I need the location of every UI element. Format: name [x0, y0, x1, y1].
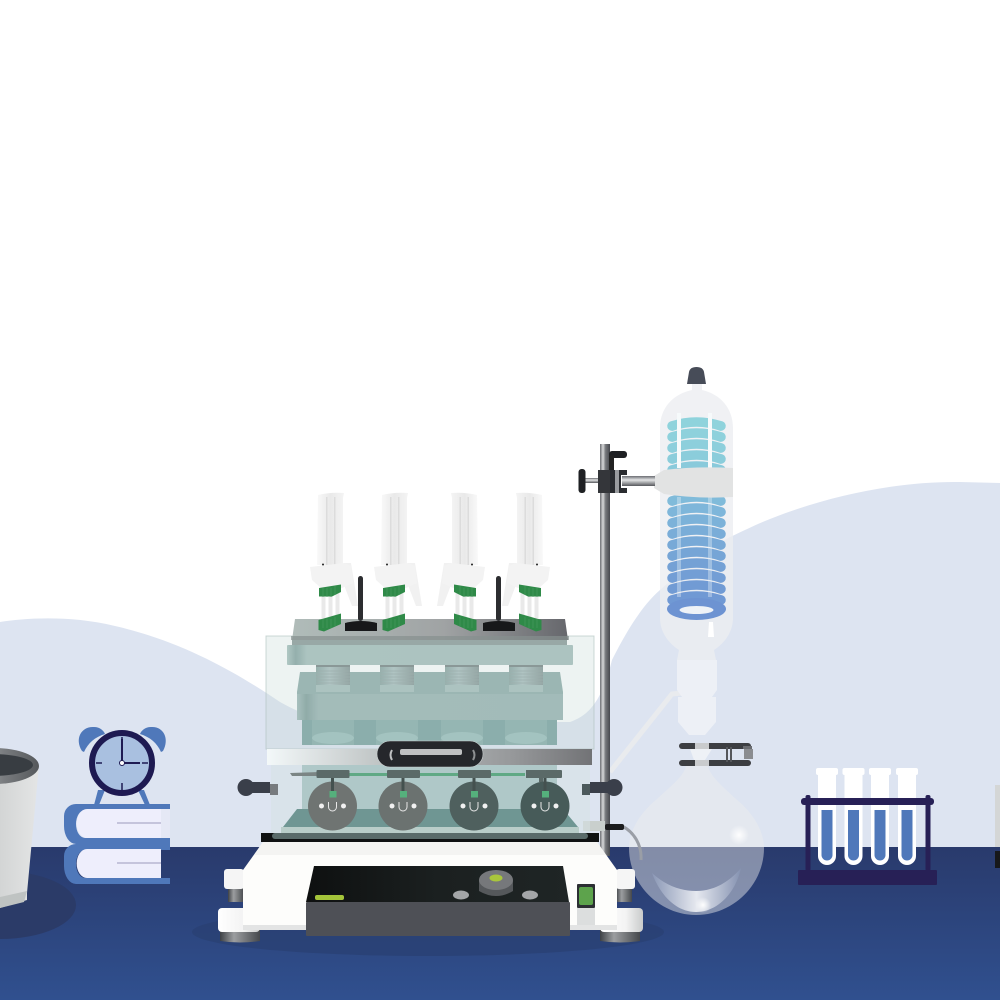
- books and alarm clock: [64, 727, 170, 884]
- mug shadow: [0, 871, 76, 939]
- mug: [0, 748, 76, 939]
- condenser clamp band: [654, 467, 733, 498]
- knob 1: [345, 576, 377, 631]
- round-bottom flask: [629, 743, 764, 915]
- tank side handles: [238, 779, 622, 796]
- flask neck: [690, 749, 712, 760]
- left handle: [238, 779, 278, 796]
- upper slab: [287, 645, 573, 665]
- flask crescent: [652, 868, 741, 912]
- table: [0, 847, 1000, 1000]
- syringe 1: [310, 493, 358, 632]
- tank band: [267, 749, 592, 765]
- syringe 4: [502, 493, 550, 632]
- power switch: [577, 884, 595, 925]
- bath internals: [287, 640, 573, 745]
- stir discs: [308, 770, 570, 830]
- top plate: [292, 619, 568, 640]
- flask clamp: [679, 743, 753, 766]
- condenser glass body: [660, 384, 733, 660]
- retort clamp: [578, 451, 655, 493]
- stand rod: [600, 444, 610, 856]
- middle block: [297, 672, 563, 720]
- tank lid handle: [377, 741, 483, 767]
- stirrer hotplate: [218, 842, 643, 942]
- shadow under stirrer: [192, 908, 664, 956]
- lower bath: [271, 765, 590, 833]
- condenser cap: [687, 367, 706, 384]
- tubes: [816, 768, 918, 865]
- mug rim: [0, 748, 39, 784]
- right handle: [582, 779, 622, 796]
- books: [64, 804, 170, 884]
- knob 2: [483, 576, 515, 631]
- background hills: [0, 482, 1000, 860]
- syringes: [291, 493, 569, 640]
- control panel: [306, 866, 570, 936]
- tank base: [261, 833, 599, 842]
- mug body: [0, 765, 39, 908]
- condenser joints: [677, 660, 717, 735]
- feet: [218, 869, 643, 942]
- flask body: [629, 766, 764, 915]
- right edge object: [995, 785, 1000, 868]
- green tubing: [300, 773, 525, 776]
- lower glass: [271, 765, 590, 833]
- lower cells: [302, 720, 557, 745]
- syringe 3: [437, 493, 485, 632]
- syringe 2: [374, 493, 422, 632]
- rack frame: [798, 795, 937, 885]
- cooling coil: [672, 422, 721, 600]
- side tube from condenser: [610, 693, 682, 772]
- glass tank upper: [266, 636, 594, 749]
- threaded columns: [316, 664, 543, 692]
- condenser: [654, 367, 733, 735]
- clock: [79, 727, 166, 805]
- white housing: [243, 842, 617, 925]
- power cable: [583, 821, 641, 860]
- test tube rack: [798, 768, 937, 885]
